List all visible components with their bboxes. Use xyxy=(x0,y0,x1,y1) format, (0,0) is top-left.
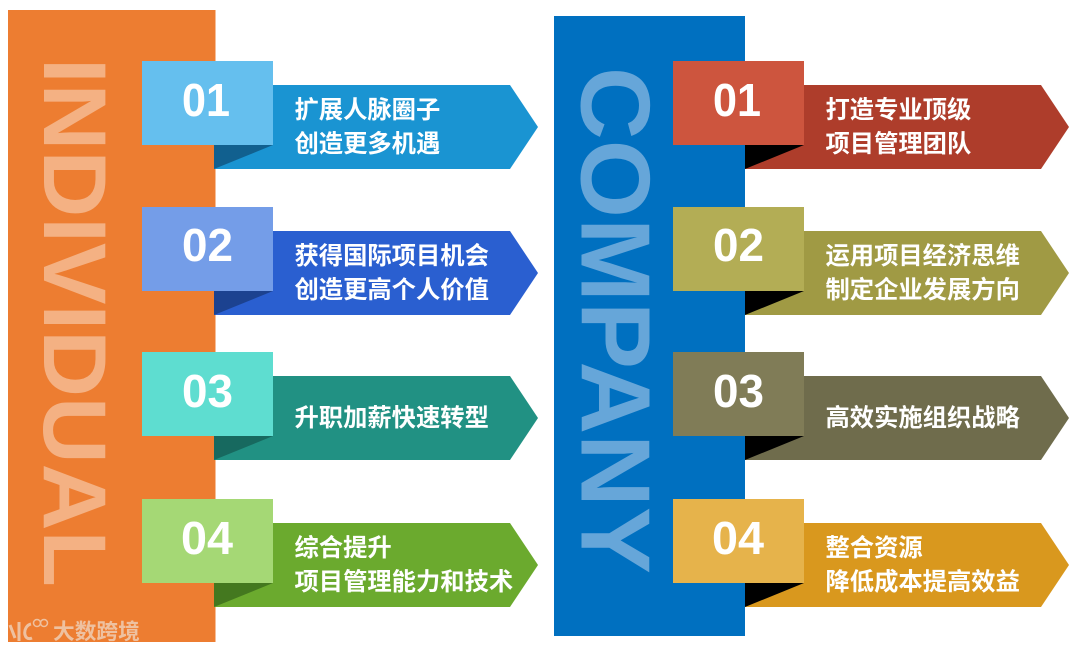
item: individual 01 xyxy=(142,61,538,169)
item: individual 04 xyxy=(142,499,538,607)
item: company 02: 02 xyxy=(713,219,764,271)
item: company 04 xyxy=(673,499,1069,607)
heading: COMPANY: COMPANY xyxy=(560,67,670,574)
item: individual 02: 获得国际项目机会 xyxy=(294,243,489,270)
item: individual 02 xyxy=(142,207,538,315)
item: individual 04: 综合提升 xyxy=(294,535,392,562)
item: company 03: 03 xyxy=(713,365,764,417)
item: individual 01: 创造更多机遇 xyxy=(294,131,440,158)
item: company 04: 降低成本提高效益 xyxy=(826,569,1020,596)
item: company 01: 打造专业顶级 xyxy=(826,97,971,124)
item: individual 01: 01 xyxy=(182,74,230,126)
item: individual 04: 04 xyxy=(181,512,233,564)
icon: logo mark xyxy=(10,620,48,641)
item: company 04: 04 xyxy=(712,512,764,564)
watermark text: 大数跨境 xyxy=(53,619,140,644)
item: company 04: 整合资源 xyxy=(826,535,923,562)
item: individual 01: 扩展人脉圈子 xyxy=(294,97,440,124)
heading: INDIVIDUAL: INDIVIDUAL xyxy=(25,58,125,587)
item: individual 03 xyxy=(142,352,538,460)
item: individual 03: 03 xyxy=(182,365,233,417)
item: company 02: 制定企业发展方向 xyxy=(826,276,1020,304)
panel: individual xyxy=(8,10,216,642)
item: company 03 xyxy=(673,352,1069,460)
watermark logo xyxy=(10,619,140,644)
item: individual 03: 升职加薪快速转型 xyxy=(294,405,489,432)
item: company 01: 项目管理团队 xyxy=(826,131,971,158)
item: individual 04: 项目管理能力和技术 xyxy=(294,569,513,596)
item: company 02: 运用项目经济思维 xyxy=(826,243,1020,270)
item: individual 02: 创造更高个人价值 xyxy=(294,277,489,304)
item: company 01 xyxy=(673,61,1069,169)
item: company 03: 高效实施组织战略 xyxy=(826,405,1021,432)
item: individual 02: 02 xyxy=(182,219,233,271)
item: company 01: 01 xyxy=(713,74,761,126)
item: company 02 xyxy=(673,207,1069,315)
panel: company xyxy=(554,16,745,636)
